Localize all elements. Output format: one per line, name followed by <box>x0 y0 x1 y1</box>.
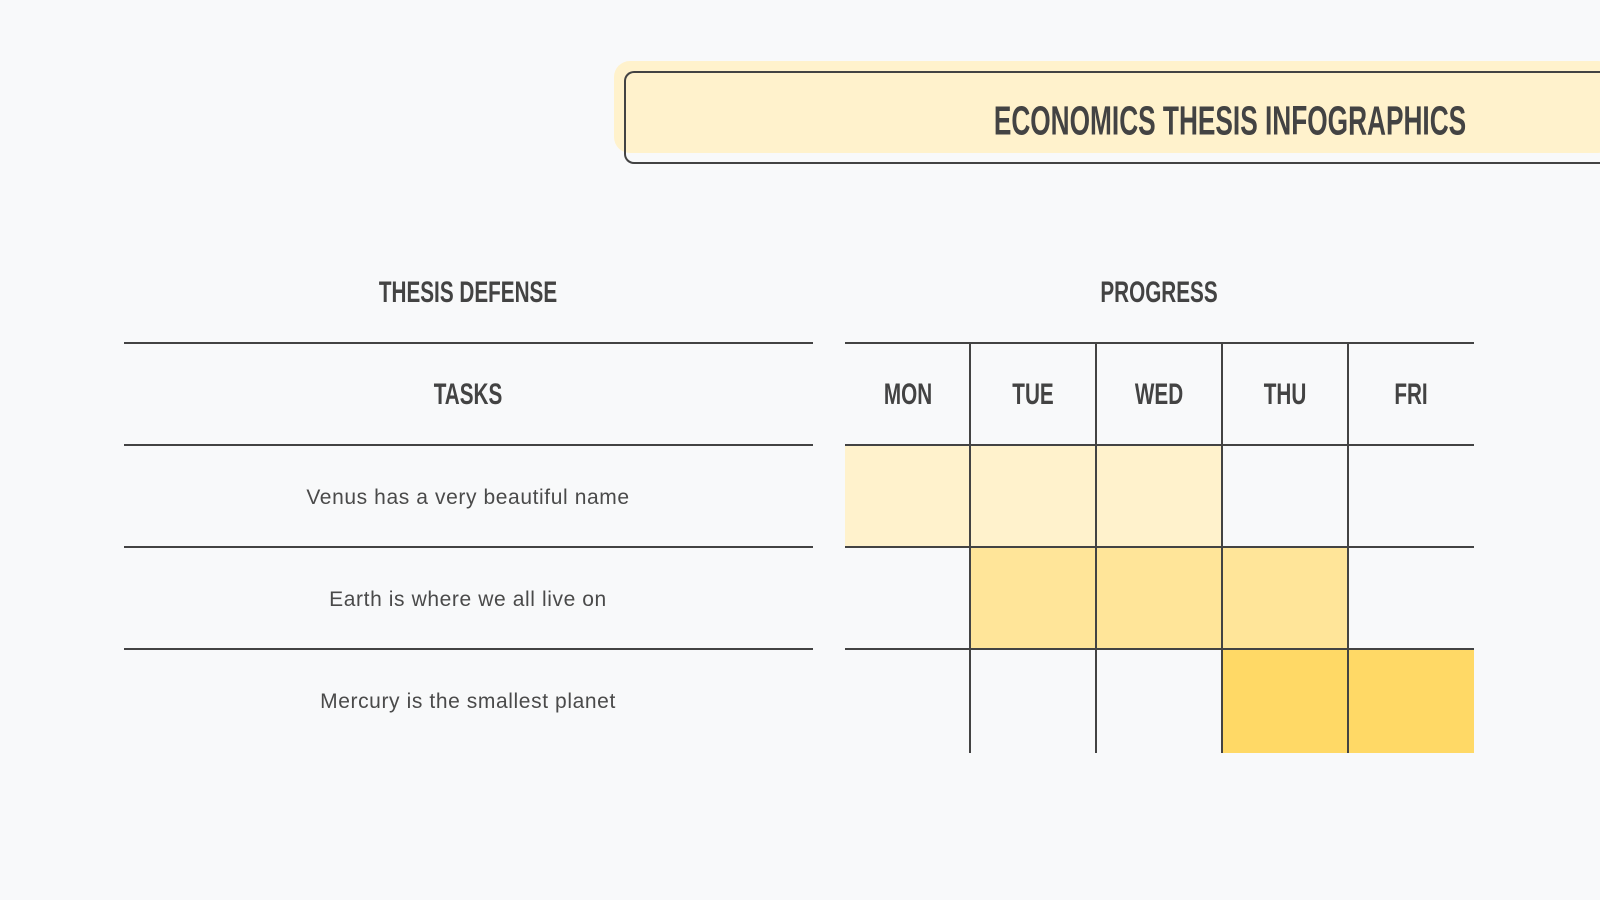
day headers <box>884 378 1428 411</box>
task 1: Venus has a very beautiful name <box>306 486 630 509</box>
day headers: THU <box>1264 378 1306 411</box>
heading: thesis defense: THESIS DEFENSE <box>379 276 557 309</box>
task 2: Earth is where we all live on <box>329 588 607 611</box>
day headers: FRI <box>1394 378 1428 411</box>
day headers: TUE <box>1012 378 1054 411</box>
day headers: MON <box>884 378 932 411</box>
progress grid <box>845 342 1474 753</box>
day headers: WED <box>1135 378 1183 411</box>
title: ECONOMICS THESIS INFOGRAPHICS <box>994 98 1466 144</box>
tasks header: TASKS <box>434 378 502 411</box>
title banner <box>614 61 1600 164</box>
heading: progress: PROGRESS <box>1100 276 1218 309</box>
task 3: Mercury is the smallest planet <box>320 690 616 713</box>
tasks table <box>124 342 813 650</box>
